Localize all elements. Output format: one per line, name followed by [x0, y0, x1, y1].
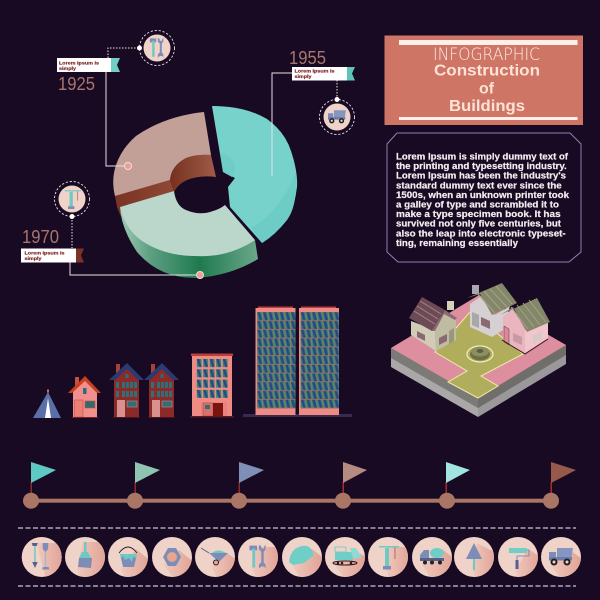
body paragraph: ting, remaining essentially	[396, 238, 519, 248]
timeline	[23, 462, 576, 509]
milestone 1	[23, 462, 56, 509]
milestone 3	[231, 462, 264, 509]
block top	[391, 295, 566, 398]
dotted connector	[108, 48, 140, 58]
body paragraph: also the leap into electronic typeset-	[396, 228, 566, 238]
townhouse 2	[144, 363, 179, 418]
house: left	[409, 297, 457, 351]
label ribbon: Lorem Ipsum is	[59, 60, 99, 66]
icon: cement mixer	[412, 537, 452, 577]
timeline bar	[31, 499, 551, 503]
icon: crane badge	[54, 182, 90, 219]
dotted connector	[336, 80, 338, 100]
icon: tools badge	[137, 30, 174, 66]
icon: dump truck	[541, 537, 581, 577]
icon row	[22, 537, 581, 577]
house: middle	[467, 283, 517, 337]
icon: brush	[65, 537, 105, 577]
title text: of	[479, 80, 495, 98]
tent	[33, 390, 61, 418]
icon: excavator	[325, 537, 365, 577]
label ribbon: simply	[294, 74, 312, 79]
body paragraph: survived not only five centuries, but	[396, 219, 561, 229]
title panel	[384, 36, 583, 125]
icon: hammer and wrench	[238, 537, 278, 577]
tower 1	[256, 306, 296, 415]
title text	[433, 45, 540, 115]
year: 1970	[22, 226, 59, 247]
icon: nut	[152, 537, 192, 577]
milestone 4	[335, 462, 367, 509]
donut chart	[113, 106, 297, 278]
label ribbon: simply	[24, 256, 42, 261]
fountain	[467, 346, 493, 362]
body paragraph: make a type specimen book. It has	[396, 209, 561, 219]
dot	[124, 162, 132, 170]
segment: pink 1925	[113, 112, 216, 217]
body paragraph: Lorem Ipsum has been the industry's	[396, 171, 566, 181]
title text: INFOGRAPHIC	[433, 45, 540, 65]
icon: paint roller	[498, 537, 538, 577]
text panel	[387, 133, 581, 262]
segment: teal 1955	[212, 106, 297, 243]
icon: bucket	[108, 537, 148, 577]
connector line	[70, 262, 200, 275]
milestone 5	[439, 462, 470, 509]
connector line	[106, 72, 128, 166]
icon: hard hat	[282, 537, 322, 577]
connector line	[272, 73, 292, 176]
title text: Buildings	[449, 98, 525, 115]
body paragraph: 1500s, when an unknown printer took	[396, 190, 570, 200]
label ribbon	[21, 248, 84, 262]
label ribbon: simply	[59, 66, 76, 71]
body paragraph: the printing and typesetting industry.	[396, 161, 567, 171]
label ribbon: Lorem Ipsum is	[24, 250, 65, 256]
milestone 2	[127, 462, 160, 509]
label ribbon	[292, 67, 355, 80]
dot	[196, 272, 204, 278]
block sides	[391, 345, 566, 417]
body paragraph	[396, 152, 570, 248]
label ribbon	[57, 58, 120, 72]
small house	[68, 376, 101, 418]
townhouse 1	[109, 363, 144, 418]
body paragraph: Lorem Ipsum is simply dummy text of	[396, 152, 569, 162]
callout 1970	[21, 182, 204, 278]
icon: shovels	[22, 537, 62, 577]
body paragraph: a galley of type and scrambled it to	[396, 200, 559, 210]
lawn and paths	[435, 312, 523, 398]
office building	[190, 354, 234, 418]
year: 1955	[289, 47, 326, 68]
dotted connector	[71, 217, 73, 248]
buildings row	[33, 306, 352, 418]
icon: tower crane	[368, 537, 408, 577]
isometric neighbourhood	[391, 283, 566, 417]
segment: green 1970	[120, 191, 258, 278]
icon: wheelbarrow	[195, 537, 235, 577]
body paragraph: standard dummy text ever since the	[396, 180, 562, 190]
label ribbon: Lorem Ipsum is	[294, 68, 335, 74]
callout 1925	[57, 30, 174, 170]
milestone 6	[543, 462, 576, 509]
tower 2	[299, 306, 339, 415]
house: right	[500, 298, 550, 354]
icon: trowel	[454, 537, 494, 577]
title text: Construction	[434, 62, 540, 80]
icon: truck badge	[320, 97, 354, 134]
year: 1925	[58, 73, 95, 94]
callout 1955	[272, 47, 355, 176]
twin towers	[243, 306, 352, 417]
